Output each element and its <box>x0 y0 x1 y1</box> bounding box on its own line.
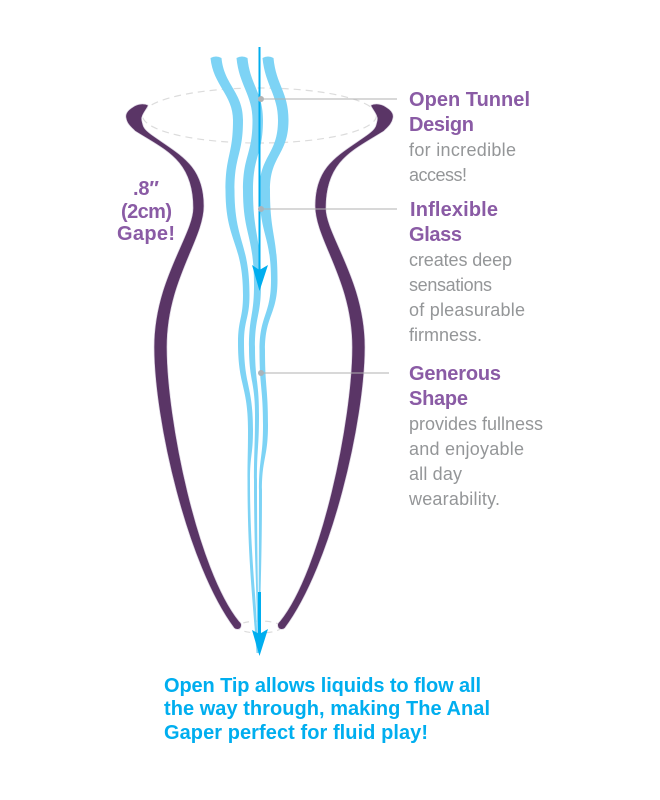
leader line: open tunnel <box>258 96 397 102</box>
callout: generous shape <box>408 363 543 509</box>
bottom caption: open tip: Open Tip allows liquids to flow all <box>164 675 481 697</box>
callout: inflexible glass: sensations <box>409 275 492 295</box>
ribbon: right <box>258 56 288 653</box>
callout: generous shape: and enjoyable <box>409 439 524 459</box>
gape label: Gape! <box>117 223 175 245</box>
callout: inflexible glass: of pleasurable <box>409 300 525 320</box>
top rim dashed ellipse <box>142 88 376 143</box>
leader line: inflexible glass <box>258 206 397 212</box>
gape label: (2cm) <box>121 201 172 223</box>
callout: generous shape: all day <box>409 464 462 484</box>
bottom caption: open tip: Gaper perfect for fluid play! <box>164 722 428 744</box>
ribbon: left <box>210 56 258 653</box>
callout: open tunnel design <box>409 89 530 185</box>
tip dashed ellipse <box>238 621 282 633</box>
callout: generous shape: Generous <box>409 363 501 385</box>
vessel right wall <box>278 104 393 629</box>
callout: open tunnel design: Open Tunnel <box>409 89 530 111</box>
leader line: generous shape <box>258 370 389 376</box>
callout: generous shape: provides fullness <box>409 414 543 434</box>
callout: generous shape: wearability. <box>408 489 500 509</box>
gape label: .8″ <box>133 178 159 200</box>
flow ribbons <box>210 56 288 653</box>
callout: open tunnel design: Design <box>409 114 474 136</box>
callout: open tunnel design: for incredible <box>409 140 516 160</box>
vessel left wall <box>126 104 241 629</box>
callout: inflexible glass: Glass <box>409 224 462 246</box>
bottom caption: open tip: the way through, making The Anal <box>164 698 490 720</box>
bottom caption: open tip <box>164 675 490 744</box>
arrow: through the tip <box>252 592 268 656</box>
callout: inflexible glass <box>409 199 525 345</box>
gape label <box>117 178 175 245</box>
callout: generous shape: Shape <box>409 388 468 410</box>
arrow: upper flow <box>252 47 268 291</box>
callout: open tunnel design: access! <box>409 165 467 185</box>
callout: inflexible glass: Inflexible <box>410 199 498 221</box>
ribbon: middle <box>236 56 263 653</box>
callout: inflexible glass: creates deep <box>409 250 512 270</box>
callout: inflexible glass: firmness. <box>409 325 482 345</box>
